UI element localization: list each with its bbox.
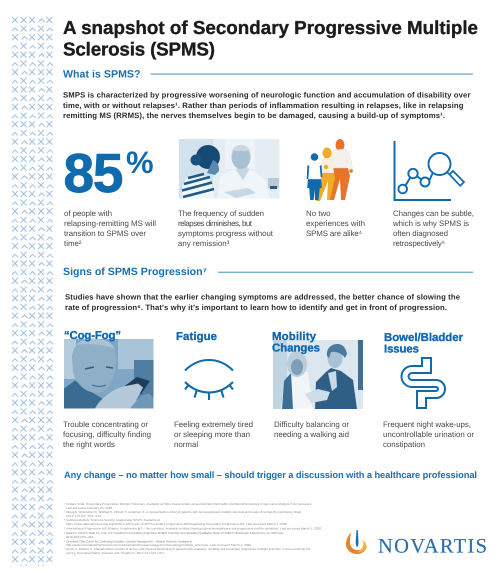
footnotes: survey. Neuropsychiatric Disease and Treatment. 2017;13:1349-1357. xyxy=(66,551,165,555)
caption: subtle changes xyxy=(392,209,474,248)
icon: closed eye xyxy=(185,360,233,400)
caption: bowel and bladder: uncontrollable urination or xyxy=(383,430,474,439)
caption: subtle changes: Changes can be subtle, xyxy=(393,209,474,218)
caption: bowel and bladder: Frequent night wake-ups, xyxy=(383,420,471,429)
caption: subtle changes: which is why SPMS is xyxy=(392,219,469,228)
caption: 85 percent: relapsing-remitting MS will xyxy=(64,219,156,228)
text block: SPMS definition: SMPS is characterized by progressive worsening of neurologic function and accumulation of disability over xyxy=(63,90,470,100)
panel: Bowel/Bladder Issues xyxy=(384,332,464,408)
caption: bowel and bladder xyxy=(383,420,474,449)
caption: cog-fog: Trouble concentrating or xyxy=(63,420,148,429)
decorative pattern strip xyxy=(11,16,54,566)
footnotes: ⁴ International Progressive MS Alliance. Progressive MS – the condition. Available at https://www.progressivemsalliance.org/progressive-ms/the-condition/. Last accessed March 1, 2020. xyxy=(64,526,322,530)
panel: Bowel/Bladder Issues: Issues xyxy=(384,344,419,356)
stat: 85%: % xyxy=(126,145,154,180)
footnotes: ¹ Cedars Sinai. Secondary Progressive Multiple Sclerosis. Available at https://www.cedars-sinai.edu/Patients/Health-Conditions/Secondary-Progressive-Multiple-Sclerosis.aspx. xyxy=(64,502,312,506)
caption: mobility xyxy=(274,420,349,439)
photo: man with phone xyxy=(64,339,154,408)
title: A snapshot of Secondary Progressive Multiple xyxy=(63,17,478,38)
callout: any change: Any change – no matter how small – should trigger a discussion with a healthcare professional xyxy=(64,470,477,480)
caption: cog-fog: the right words xyxy=(63,440,115,449)
caption: subtle changes: often diagnosed xyxy=(393,229,448,238)
footnotes: http://www.clevelandclinicmeded.com/medicalpubs/diseasemanagement/neurology/multiple_sclerosis/. Last accessed March 1, 2020. xyxy=(66,543,252,547)
text block: SPMS definition: remitting MS (RRMS), the nerves themselves begin to be damaged, causing a build-up of symptoms¹. xyxy=(63,111,445,120)
caption: bowel and bladder: constipation xyxy=(383,440,425,449)
icon: flame xyxy=(346,530,367,554)
caption: mobility: Difficulty balancing or xyxy=(274,420,349,429)
footnotes: 2012;135(3): 900–911. xyxy=(66,514,102,518)
caption: 85 percent: transition to SPMS over xyxy=(64,229,146,238)
caption: relapses: any remission³ xyxy=(178,239,230,248)
caption: cog-fog: focusing, difficulty finding xyxy=(63,430,151,439)
footnotes xyxy=(64,502,322,555)
footnotes: Last accessed February 25, 2020. xyxy=(66,506,113,510)
blue child xyxy=(307,153,322,200)
title: Sclerosis (SPMS) xyxy=(63,38,215,60)
man coat xyxy=(217,168,270,198)
panel: Cog-Fog xyxy=(64,330,154,408)
text block: early symptoms xyxy=(65,292,461,312)
caption: relapses xyxy=(178,209,274,248)
panel: Cog-Fog: “Cog-Fog” xyxy=(64,330,121,342)
panel: Mobility Changes: Changes xyxy=(272,342,320,354)
text block: SPMS definition xyxy=(63,90,470,120)
caption: fatigue: or sleeping more than xyxy=(174,430,250,439)
heading: Signs of SPMS Progression: Signs of SPMS Progression⁷ xyxy=(63,266,207,278)
text block: SPMS definition: time, with or without relapses¹. Rather than periods of inflammation resulting in relapses, like in relapsing xyxy=(63,101,464,110)
panel: Bowel/Bladder Issues: Bowel/Bladder xyxy=(384,332,464,344)
logo: Novartis: NOVARTIS xyxy=(378,536,487,558)
text block: early symptoms: rate of progression⁶. That's why it's important to learn how to identify and get in front of progression. xyxy=(65,303,447,312)
caption: 85 percent: time² xyxy=(64,239,82,248)
yellow adult xyxy=(316,148,335,201)
caption: no two experiences: No two xyxy=(306,209,331,218)
stat: 85%: 85 xyxy=(64,142,124,204)
orange adult xyxy=(329,139,350,200)
panel: Fatigue: Fatigue xyxy=(176,331,217,343)
panel: Mobility Changes: Mobility xyxy=(272,331,317,343)
stat: 85% xyxy=(64,142,154,204)
caption: cog-fog xyxy=(63,420,151,449)
caption: fatigue: Feeling extremely tired xyxy=(174,420,253,429)
footnotes: ⁵ Davies F, Wood F, Brain KE, et al. The Transition to Secondary Progressive Multiple Sclerosis: An Exploratory Qualitative Study of Health Professionals' Experiences. Int J MS Care. xyxy=(64,531,284,535)
caption: 85 percent xyxy=(64,209,156,248)
caption: no two experiences xyxy=(306,209,365,238)
device xyxy=(224,188,256,198)
woman xyxy=(196,145,220,169)
photo: patient and doctor xyxy=(179,139,280,198)
title xyxy=(63,17,478,60)
caption: fatigue: normal xyxy=(174,440,198,449)
icon: three people xyxy=(307,139,353,201)
caption: relapses: relapses diminishes, but xyxy=(178,219,253,228)
footnotes: ⁶ Cleveland Clinic Center for Continuing Education. Disease Management – Multiple Sclerosis. Available at xyxy=(64,540,192,544)
footnotes: 2016;18(5):251–264. xyxy=(66,535,94,539)
caption: fatigue xyxy=(174,420,253,449)
panel: Mobility Changes xyxy=(272,331,363,409)
heading: What is SPMS?: What is SPMS? xyxy=(63,68,140,80)
caption: no two experiences: SPMS are alike⁴ xyxy=(306,229,362,238)
icon: line chart with magnifier xyxy=(394,141,464,200)
caption: subtle changes: retrospectively⁵ xyxy=(393,239,445,248)
caption: relapses: symptoms progress without xyxy=(178,229,274,238)
caption: mobility: needing a walking aid xyxy=(274,430,349,439)
footnotes: https://www.nationalmssociety.org/What-is-MS/Types-of-MS/Secondary-progressive-MS/Diagnosing-Secondary-Progressive-MS. Last accessed March 1, 2020. xyxy=(66,522,288,526)
footnotes: ³ National Multiple Sclerosis Society. Diagnosing SPMS. Available at xyxy=(64,518,160,522)
caption: no two experiences: experiences with xyxy=(306,219,365,228)
footnotes: ⁷ Gross H, Watson C. Characteristics, burden of illness, and physical functioning of patients with relapsing- remitting and secondary progressive multiple sclerosis: a cross-sectional US xyxy=(64,547,310,551)
footnotes: ² Skoog B, Runmarker B, Winblad S, Ekholm S, Andersen O. A representative cohort of patients with non-progressive multiple sclerosis at the age of normal life expectancy. Brain. xyxy=(64,510,302,514)
logo: Novartis xyxy=(346,530,487,558)
caption: 85 percent: of people with xyxy=(64,209,112,218)
panel: Fatigue xyxy=(176,331,233,400)
text block: early symptoms: Studies have shown that the earlier changing symptoms are addressed, the better chance of slowing the xyxy=(65,292,461,302)
caption: relapses: The frequency of sudden xyxy=(178,209,264,218)
icon: intestines xyxy=(402,358,445,408)
photo: two women xyxy=(273,340,363,409)
